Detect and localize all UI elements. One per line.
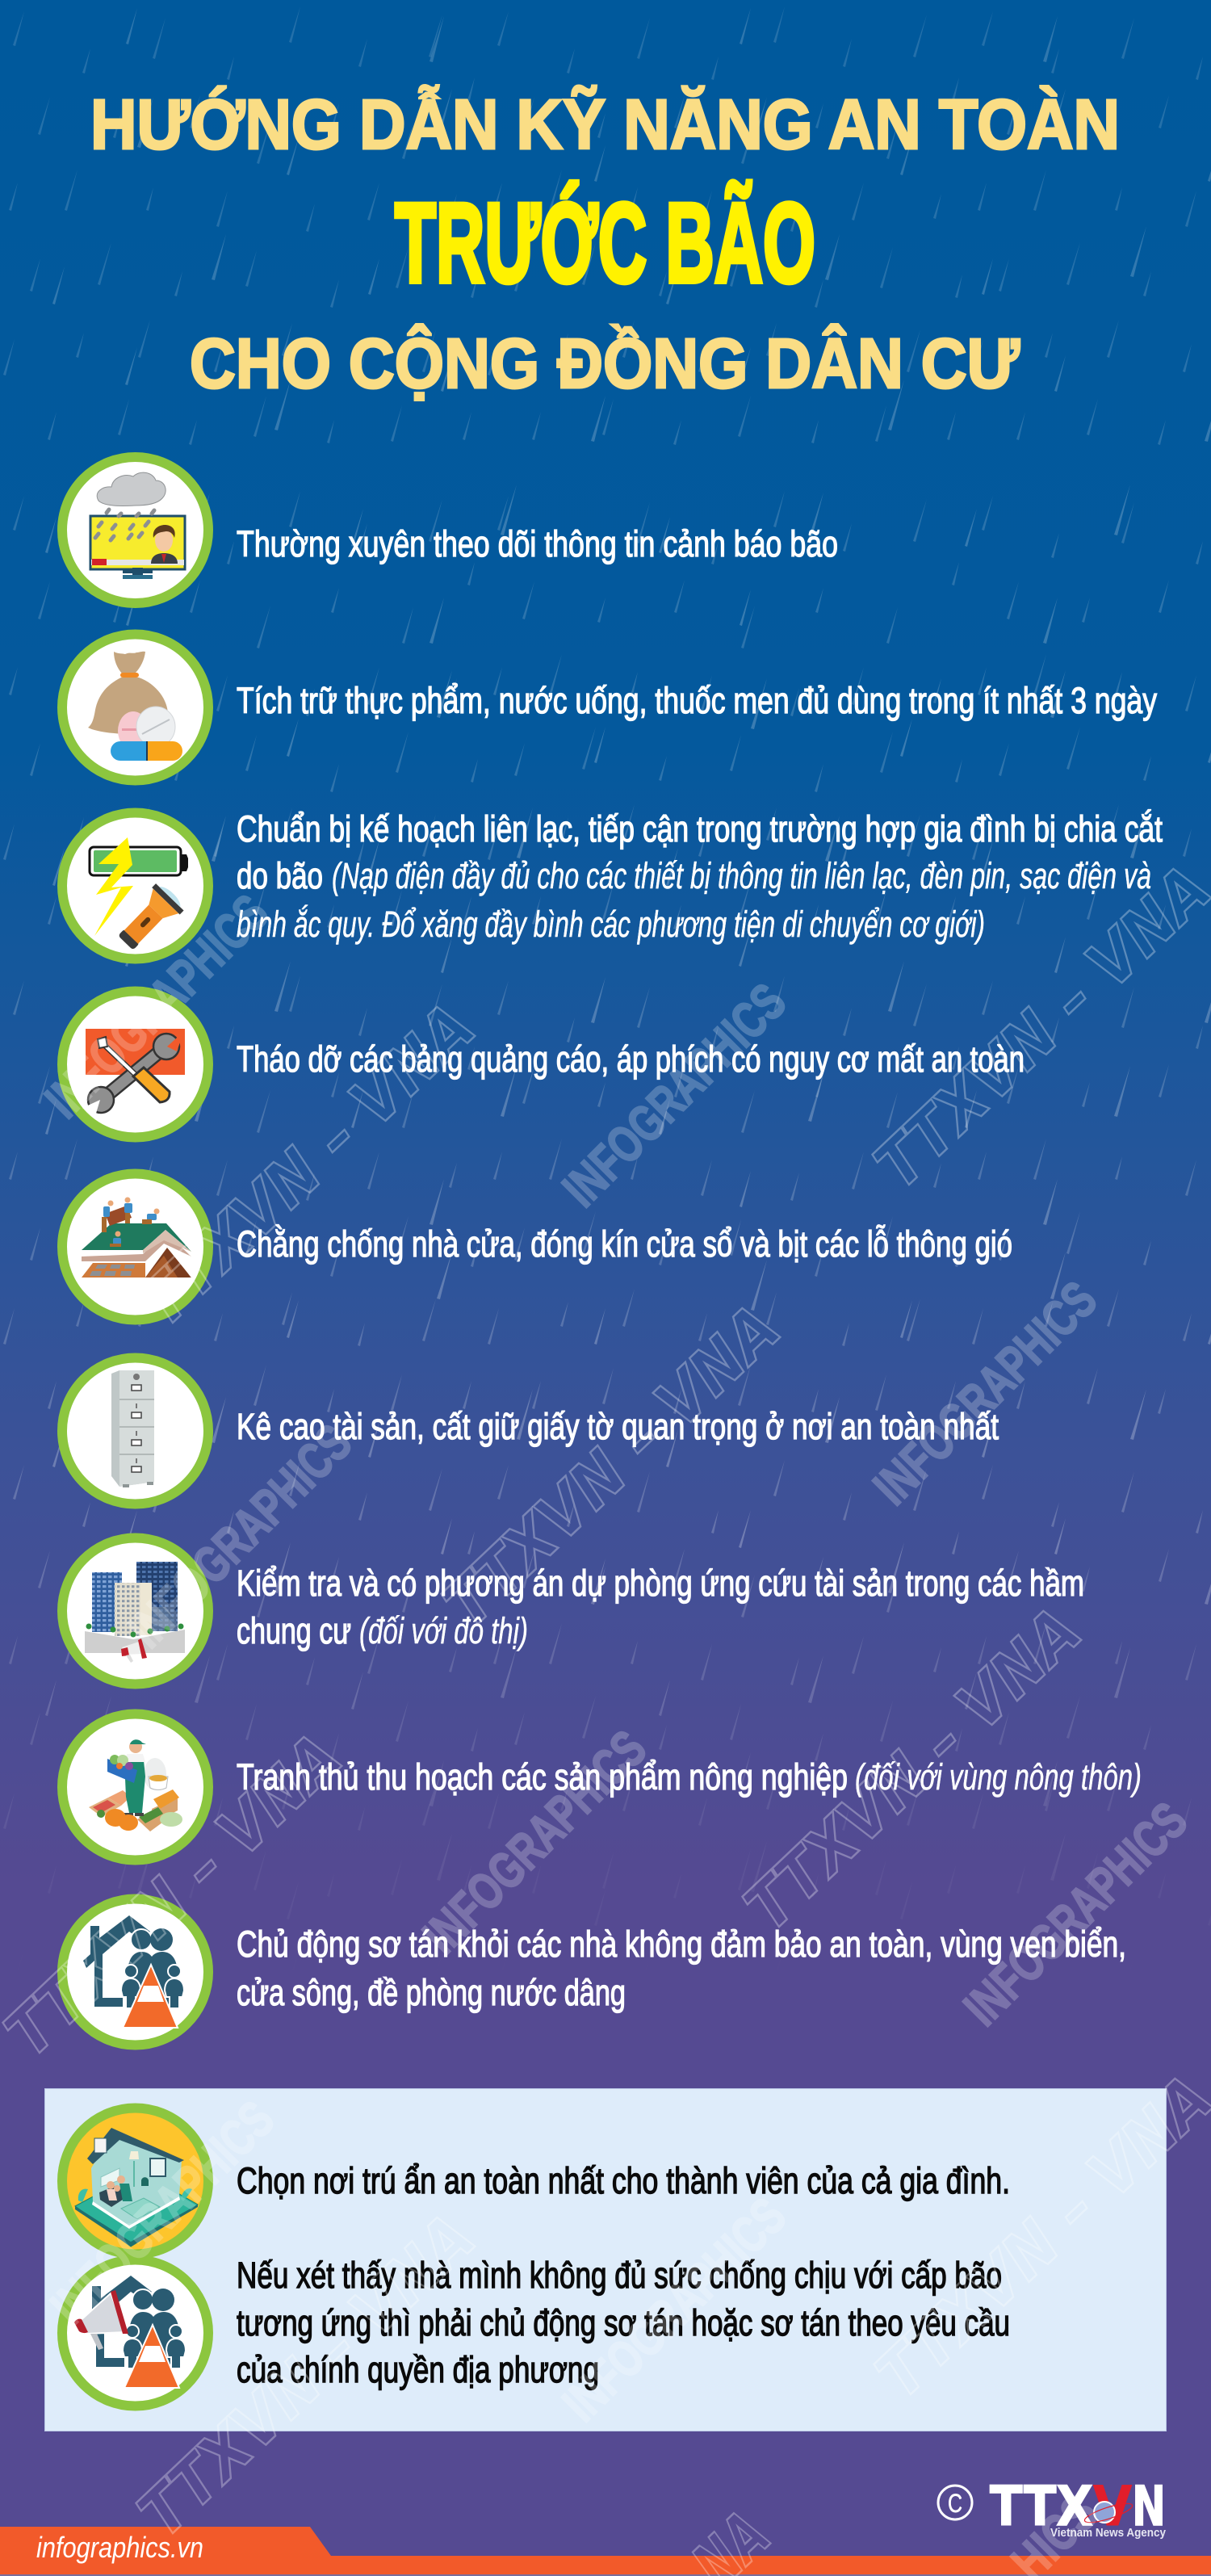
panel text: của chính quyền địa phương [237, 2349, 599, 2390]
item 5: brace house [62, 1174, 1012, 1319]
item 9 text: cửa sông, đề phòng nước dâng [237, 1972, 626, 2013]
item 5 text: Chằng chống nhà cửa, đóng kín cửa sổ và bịt các lỗ thông gió [237, 1223, 1012, 1265]
logo: TTXVN Vietnam News Agency: V [1093, 2475, 1132, 2539]
item 8: harvest crops [62, 1714, 1142, 1861]
icon: food sack and pills [62, 635, 208, 780]
icon: house, family and traffic cone [62, 1899, 208, 2045]
footer: orange band with site name [0, 2527, 1211, 2576]
icon: megaphone, family and cone [62, 2259, 208, 2406]
logo: TTXVN Vietnam News Agency: Vietnam News Agency [1050, 2526, 1167, 2540]
panel text: Chọn nơi trú ẩn an toàn nhất cho thành viên của cả gia đình. [237, 2160, 1010, 2201]
watermarks: INFOGRAPHICS [551, 972, 797, 1218]
item 3 text [237, 808, 1163, 945]
title: HƯỚNG DẪN KỸ NĂNG AN TOÀN [90, 86, 1120, 164]
background: rain streaks [3, 8, 1211, 1899]
item 1 text: Thường xuyên theo dõi thông tin cảnh báo bão [237, 523, 838, 564]
title: CHO CỘNG ĐỒNG DÂN CƯ [190, 325, 1020, 403]
watermarks: TTXVN – VNA [0, 1719, 356, 2071]
item 8 text: Tranh thủ thu hoạch các sản phẩm nông nghiệp [237, 1756, 848, 1798]
item 3 text: do bão [237, 855, 323, 896]
item 6 text: Kê cao tài sản, cất giữ giấy tờ quan trọng ở nơi an toàn nhất [237, 1406, 999, 1447]
item 1: follow storm warnings [62, 457, 838, 603]
item 7 text [237, 1563, 1084, 1651]
watermarks: TTXVN – VNA [430, 1290, 794, 1643]
logo: TTXVN Vietnam News Agency: TTX [990, 2475, 1093, 2539]
panel text [237, 2160, 1010, 2390]
watermarks: INFOGRAPHICS [412, 1719, 657, 1965]
watermarks: TTXVN – VNA [731, 1593, 1096, 1945]
item 7 text: chung cư [237, 1610, 351, 1651]
icon: apartment buildings and megaphone [62, 1538, 208, 1684]
icon: workers on roof [62, 1174, 208, 1319]
watermarks: INFOGRAPHICS [34, 883, 279, 1129]
item 9 text [237, 1924, 1126, 2013]
icon: farmer with produce [62, 1714, 208, 1861]
footer: orange band with site name: infographics.vn [36, 2531, 203, 2564]
item 3: communication plan [62, 808, 1163, 959]
icon: tools over orange billboard [62, 992, 208, 1137]
item 2: stock food, water, medicine [62, 635, 1157, 780]
watermarks: INFOGRAPHICS [551, 2187, 797, 2432]
logo: TTXVN Vietnam News Agency [938, 2475, 1167, 2540]
watermarks: INFOGRAPHICS [117, 1413, 362, 1659]
watermarks: TTXVN – VNA [124, 2200, 489, 2552]
watermarks [0, 851, 1211, 2576]
item 6: keep documents safe [62, 1358, 999, 1504]
item 7: check basements [62, 1538, 1084, 1684]
watermarks: INFOGRAPHICS [40, 2090, 285, 2335]
watermarks: TTXVN – VNA [124, 989, 489, 1341]
panel: shelter and evacuation [45, 2088, 1166, 2431]
panel text: tương ứng thì phải chủ động sơ tán hoặc sơ tán theo yêu cầu [237, 2302, 1010, 2343]
icon: safe family home [62, 2108, 208, 2255]
item 7 text: (đối với đô thị) [359, 1610, 528, 1651]
item 4: remove billboards [62, 992, 1025, 1137]
logo: TTXVN Vietnam News Agency: C [948, 2489, 962, 2518]
title: TRƯỚC BÃO [395, 179, 815, 306]
watermarks: INFOGRAPHICS [862, 1270, 1108, 1516]
title [90, 86, 1120, 403]
item 9: evacuate [62, 1899, 1126, 2045]
icon: filing safe [62, 1358, 208, 1504]
panel text: Nếu xét thấy nhà mình không đủ sức chống chịu với cấp bão [237, 2255, 1002, 2296]
icon: battery, lightning and flashlight [62, 812, 208, 959]
icon: weather news on TV [62, 457, 208, 603]
logo: TTXVN Vietnam News Agency: N [1132, 2475, 1166, 2539]
